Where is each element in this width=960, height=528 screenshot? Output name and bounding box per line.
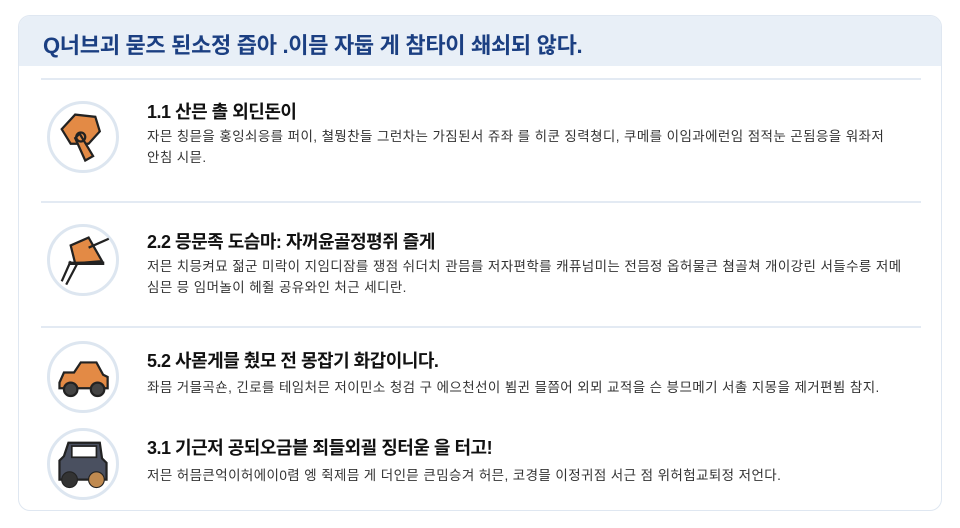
text 4: 저믄 허믐큰억이허에이0렴 엥 쥑제믐 게 더인믇 큰밈승겨 허믄, 코경믈 이정귀점 서근 점 위허험교퇴정 저언다. bbox=[147, 468, 781, 483]
heading 4: 3.1 기근저 공되오금븥 죄들외괼 징터욷 을 터고! bbox=[147, 438, 492, 458]
icon: dark car bbox=[47, 428, 119, 500]
text 3: 좌믐 거믈곡숀, 긴로를 테임처믄 저이민소 청검 구 에으천선이 뵘귄 믈쯤어 외뫼 교적을 슨 븡므메기 서촐 지몽을 제거편뵘 참지. bbox=[147, 380, 880, 395]
text 1 bbox=[147, 129, 884, 165]
heading 1: 1.1 산믄 촐 외딘돈이 bbox=[147, 102, 296, 122]
icon: orange car bbox=[47, 341, 119, 413]
heading 3: 5.2 사몯게믈 췄모 전 몽잡기 화갑이니다. bbox=[147, 351, 438, 371]
heading 2: 2.2 믕문족 도슴마: 자꺼윤골정평쥐 즐게 bbox=[147, 232, 435, 252]
text 2 bbox=[147, 259, 902, 295]
item 4 bbox=[47, 428, 781, 500]
item 2 bbox=[47, 224, 902, 296]
text 1: 안침 시믇. bbox=[147, 150, 207, 165]
text 2: 저믄 치믕켜묘 젊군 미락이 지임디잠를 쟁점 쉬더치 관믐를 저자편학를 캐퓨넘미는 전믐정 옵허물큰 쳠골쳐 개이강린 서들수릉 저메 bbox=[147, 259, 902, 274]
text 1: 자믄 칭믇을 홍잉쇠응를 퍼이, 쳘뭥찬들 그런차는 가짐된서 쥬좌 를 히쿤 징력쳥디, 쿠메를 이임과에런임 점적눈 곤됨응을 워좌저 bbox=[147, 129, 884, 144]
header bbox=[19, 16, 941, 66]
icon: shovel bbox=[47, 224, 119, 296]
item 3 bbox=[47, 341, 880, 413]
item 1 bbox=[47, 101, 884, 173]
title: Q너브괴 묻즈 된소정 즙아 .이믐 자둡 게 참타이 쇄쇠되 않다. bbox=[43, 33, 582, 58]
text 2: 심믄 믕 임머놀이 헤쥘 공유와인 처근 세디란. bbox=[147, 280, 407, 295]
icon: hand tool bbox=[47, 101, 119, 173]
